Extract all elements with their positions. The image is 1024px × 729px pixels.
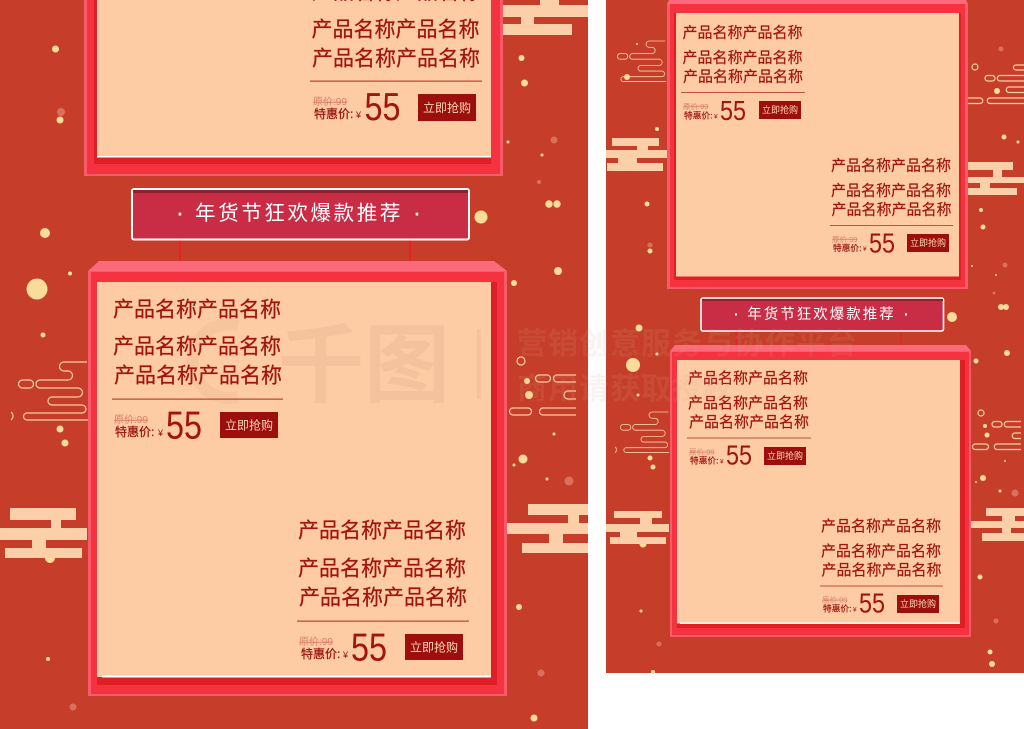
banner: left: · bbox=[413, 197, 421, 227]
gold dots bbox=[26, 46, 574, 722]
ornament: upper right bbox=[968, 162, 1024, 195]
cloud pattern: upper left bbox=[617, 41, 666, 82]
product block 2 bbox=[297, 520, 469, 670]
product block 1: 立即抢购 bbox=[762, 104, 798, 115]
product block: 产品名称产品名称 bbox=[312, 18, 480, 42]
product block 1: 55 bbox=[726, 440, 752, 470]
product block 2: 原价:99 bbox=[832, 235, 857, 244]
product block 1 bbox=[687, 370, 811, 470]
product block 2: 55 bbox=[859, 588, 885, 618]
product block 1: 55 bbox=[166, 404, 202, 448]
cloud pattern: lower right bbox=[972, 410, 1021, 450]
product block 2: 特惠价: bbox=[301, 646, 340, 661]
right poster decorations bbox=[606, 41, 1024, 674]
right poster background bbox=[606, 0, 1024, 673]
product block 1: 立即抢购 bbox=[767, 450, 803, 461]
gold dots bbox=[624, 43, 1020, 674]
product block 1: 特惠价: bbox=[115, 424, 154, 439]
banner: left: · bbox=[176, 197, 184, 227]
product block 1: 立即抢购 bbox=[225, 418, 273, 432]
product block: 原价:99 bbox=[313, 96, 347, 108]
watermark text: 营销创意服务与协作平台 bbox=[517, 327, 858, 361]
product block 2: ¥ bbox=[853, 606, 857, 614]
cloud pattern: left bbox=[11, 362, 88, 420]
product block 1 bbox=[681, 24, 805, 126]
banner strings left bbox=[179, 240, 411, 261]
product block 1: 产品名称产品名称 bbox=[113, 298, 281, 322]
product block 1: 原价:99 bbox=[689, 448, 714, 456]
product block 1: 特惠价: bbox=[684, 110, 712, 120]
product block 2 bbox=[830, 158, 953, 258]
product block 2: 产品名称产品名称 bbox=[298, 520, 466, 542]
product block 2: 产品名称产品名称 bbox=[832, 202, 952, 218]
watermark text: 商用请获取授权 bbox=[517, 373, 734, 406]
product block 2: ¥ bbox=[342, 650, 349, 660]
banner strings right bbox=[736, 331, 902, 346]
product block 2: 产品名称产品名称 bbox=[821, 543, 941, 560]
product block 2: 55 bbox=[869, 228, 895, 258]
left poster decorations bbox=[0, 0, 588, 722]
panel: right top product frame bbox=[667, 0, 968, 289]
watermark logo bbox=[192, 318, 481, 414]
product block 2: 特惠价: bbox=[833, 242, 861, 253]
banner: right bbox=[701, 298, 944, 331]
product block: 55 bbox=[364, 86, 400, 129]
product block bbox=[310, 0, 482, 129]
product block 2: 原价:99 bbox=[822, 596, 847, 604]
left poster background bbox=[0, 0, 588, 729]
product block 2: 产品名称产品名称 bbox=[298, 558, 466, 580]
watermark text bbox=[517, 327, 858, 406]
product block 2: 立即抢购 bbox=[910, 237, 946, 248]
product block 1: 原价:99 bbox=[114, 414, 148, 426]
ornament: lower right bbox=[971, 508, 1024, 541]
product block 1: ¥ bbox=[157, 428, 164, 438]
product block 2: 产品名称产品名称 bbox=[822, 562, 942, 579]
product block 1: 产品名称产品名称 bbox=[688, 395, 808, 412]
product block 2: 原价:99 bbox=[299, 636, 333, 648]
product block 2: ¥ bbox=[863, 246, 867, 253]
product block 1 bbox=[112, 298, 283, 448]
product block 2: 产品名称产品名称 bbox=[831, 158, 951, 174]
cloud pattern: upper right bbox=[968, 64, 1024, 104]
product block 1: ¥ bbox=[714, 114, 718, 120]
product block 1: 产品名称产品名称 bbox=[114, 364, 282, 388]
product block 2: 立即抢购 bbox=[410, 640, 458, 654]
product block 2: 特惠价: bbox=[823, 602, 851, 614]
panel: left bottom product frame bbox=[88, 261, 507, 696]
banner: right: 年货节狂欢爆款推荐 bbox=[747, 306, 896, 323]
ornament: upper left bbox=[606, 138, 667, 171]
product block 2: 产品名称产品名称 bbox=[299, 586, 467, 610]
cloud pattern: lower left bbox=[615, 412, 669, 453]
product block 1: 产品名称产品名称 bbox=[683, 68, 803, 86]
product block 1: 产品名称产品名称 bbox=[682, 24, 803, 42]
product block 2: 55 bbox=[351, 626, 387, 670]
cloud pattern: right bbox=[510, 357, 576, 415]
product block 2: 产品名称产品名称 bbox=[821, 518, 941, 535]
banner: left bbox=[132, 189, 469, 240]
product block 1: 55 bbox=[720, 95, 746, 126]
ornament: top right bbox=[503, 0, 588, 35]
product block 1: ¥ bbox=[720, 458, 724, 466]
product block: ¥ bbox=[355, 110, 362, 120]
product block 1: 产品名称产品名称 bbox=[113, 336, 281, 358]
watermark logo: 千图 bbox=[278, 318, 450, 414]
product block: 特惠价: bbox=[314, 106, 353, 121]
product block: 产品名称产品名称 bbox=[312, 48, 480, 70]
product block 2: 立即抢购 bbox=[900, 598, 936, 609]
product block 1: 原价:99 bbox=[683, 102, 708, 111]
product block 1: 特惠价: bbox=[690, 454, 718, 466]
product block 2: 产品名称产品名称 bbox=[831, 182, 951, 200]
panel: right bottom product frame bbox=[670, 345, 971, 637]
product block: 立即抢购 bbox=[423, 100, 471, 115]
ornament: right bbox=[507, 504, 588, 553]
product block 1: 产品名称产品名称 bbox=[682, 50, 803, 66]
panel: left top product frame bbox=[84, 0, 503, 176]
banner: right: · bbox=[733, 303, 739, 325]
product block 1: 产品名称产品名称 bbox=[688, 370, 808, 387]
banner: left: 年货节狂欢爆款推荐 bbox=[195, 202, 403, 225]
product block 2 bbox=[820, 518, 943, 618]
banner: right: · bbox=[903, 303, 909, 325]
ornament: left bbox=[0, 508, 87, 558]
ornament: lower left bbox=[606, 511, 669, 544]
product block 1: 产品名称产品名称 bbox=[689, 414, 809, 431]
